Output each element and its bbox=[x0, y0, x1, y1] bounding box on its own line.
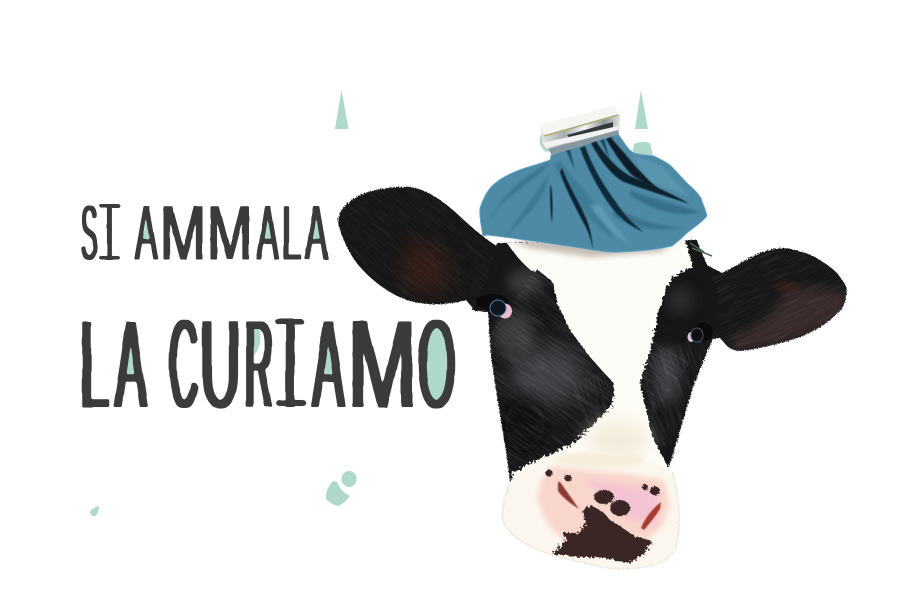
nose spot bbox=[650, 486, 660, 496]
mint fill: first A of heading bbox=[335, 90, 348, 129]
ear silhouette bbox=[338, 187, 503, 312]
blaze warm shading bbox=[588, 422, 648, 458]
soft fold: right upper light bbox=[632, 155, 690, 196]
text: la curiamo: I bbox=[283, 294, 297, 436]
left eye bbox=[476, 294, 512, 318]
mint marks of the white script line bbox=[90, 471, 356, 516]
mint fills of the A letters bbox=[142, 215, 322, 244]
mint fill: heading letters behind the bag bbox=[632, 142, 654, 160]
reddish fold bbox=[774, 282, 800, 292]
brown inner ear bbox=[396, 238, 453, 304]
text: si ammala: A bbox=[257, 188, 279, 277]
right eye bbox=[688, 323, 713, 342]
muzzle bbox=[503, 452, 679, 568]
left cheek hair bbox=[490, 272, 690, 478]
text: si ammala: M bbox=[160, 189, 206, 277]
muzzle warm hair bbox=[555, 453, 645, 467]
text: si ammala: M bbox=[207, 190, 252, 277]
cap olive line bbox=[544, 115, 618, 136]
text: si ammala: A bbox=[305, 189, 328, 277]
mint mark: letter bowl bbox=[326, 481, 350, 506]
text: si ammala: S bbox=[81, 190, 97, 278]
heading: white first line with mint letter fills bbox=[85, 35, 654, 192]
right brow sheen bbox=[666, 286, 694, 314]
soft fold: left shade bbox=[486, 163, 550, 225]
left ear bbox=[337, 186, 498, 312]
pleat: upper right wedge bbox=[606, 137, 660, 190]
bag body bbox=[480, 134, 707, 252]
mint fill: last A of heading bbox=[635, 90, 648, 129]
upper cheek sheen bbox=[495, 311, 535, 359]
pleat: left thin wedge bbox=[550, 185, 553, 223]
sclera bbox=[498, 304, 512, 318]
head black base bbox=[472, 240, 718, 482]
ear inner colouring and hair bbox=[339, 188, 493, 307]
dark nose patch bbox=[552, 505, 652, 563]
text: si ammala: I bbox=[105, 189, 114, 277]
nose spot bbox=[610, 500, 630, 516]
line: la curiamo bbox=[80, 293, 456, 436]
soft fold: centre shade bbox=[555, 160, 615, 240]
cap lower band bbox=[548, 130, 619, 155]
text: si ammala bbox=[81, 188, 328, 278]
pink nose bbox=[537, 467, 670, 542]
cap body bbox=[541, 106, 620, 155]
ear silhouette bbox=[703, 248, 847, 351]
nose spot bbox=[642, 484, 648, 490]
nose spot bbox=[546, 470, 552, 476]
right cheek sheen bbox=[654, 345, 680, 405]
cow head with ice bag bbox=[337, 106, 848, 570]
line: si ammala bbox=[81, 188, 328, 278]
text: si ammala: A bbox=[135, 189, 158, 277]
pleat: right wavy wedge bbox=[591, 141, 690, 204]
cap dark band bbox=[567, 122, 613, 141]
cap lid bbox=[541, 106, 619, 136]
eyelid shadow bbox=[693, 323, 713, 341]
right cheek hair bbox=[574, 336, 713, 447]
eyelid shadow bbox=[476, 294, 508, 310]
mint mark: dot bbox=[342, 471, 356, 487]
right nostril bbox=[641, 502, 661, 530]
soft fold: right lower shade bbox=[630, 190, 700, 214]
iris bbox=[691, 328, 703, 342]
head shading and hair bbox=[489, 264, 713, 478]
nose spot bbox=[594, 490, 614, 504]
text: la curiamo: C bbox=[169, 294, 198, 435]
text: la curiamo: L bbox=[80, 293, 109, 435]
text: la curiamo: A bbox=[312, 294, 344, 436]
mint fills of A, R, A and O letters bbox=[123, 323, 447, 404]
text: la curiamo: M bbox=[348, 293, 417, 435]
grass bits by the right ear bbox=[690, 243, 712, 256]
brow sheen bbox=[507, 268, 543, 296]
nose centre pink bbox=[583, 478, 660, 525]
left cheek dark area bbox=[505, 399, 545, 451]
white blaze bbox=[507, 236, 693, 500]
text: la curiamo: O bbox=[418, 294, 456, 436]
pleat: neck short bbox=[566, 139, 610, 170]
pleat: bottom centre wedge bbox=[560, 168, 593, 249]
brown lower ear lobe bbox=[728, 288, 850, 352]
ear hair texture bbox=[339, 188, 493, 307]
ice bag bbox=[480, 106, 707, 252]
text: la curiamo: R bbox=[245, 293, 273, 435]
text: si ammala: L bbox=[282, 189, 301, 277]
text: la curiamo: A bbox=[115, 294, 146, 436]
mint fill: C of heading behind the cap bbox=[540, 131, 552, 152]
cap white lower band bbox=[542, 126, 618, 148]
nose spot bbox=[564, 474, 572, 482]
soft fold: left lower bbox=[505, 175, 548, 238]
right ear bbox=[707, 248, 848, 352]
infographic canvas bbox=[81, 90, 848, 570]
ear colouring and hair bbox=[712, 249, 847, 351]
ear hair texture bbox=[712, 249, 845, 348]
pleat: centre long wedge bbox=[580, 146, 644, 232]
left cheek fur sheen bbox=[510, 345, 586, 405]
metal cap bbox=[541, 106, 620, 155]
iris bbox=[490, 300, 506, 316]
muzzle edge shadow bbox=[503, 472, 679, 568]
text: la curiamo bbox=[80, 293, 456, 436]
nose spots bbox=[546, 470, 660, 516]
sclera bbox=[688, 332, 694, 342]
mint mark: small teardrop bbox=[90, 506, 99, 516]
left nostril bbox=[558, 482, 579, 509]
soft fold: lower right sweep bbox=[612, 208, 685, 229]
soft fold: lower centre light bbox=[590, 204, 632, 246]
shadow under ice bag bbox=[510, 236, 684, 257]
text: la curiamo: U bbox=[200, 293, 240, 435]
